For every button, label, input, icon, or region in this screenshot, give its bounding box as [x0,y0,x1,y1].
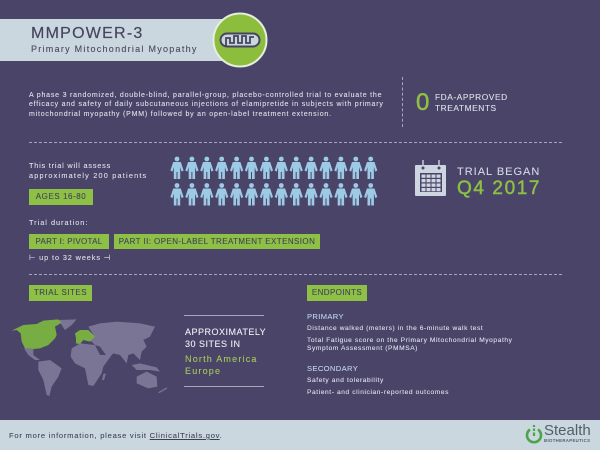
intro text: efficacy and safety of daily subcutaneous injections of elamipretide in subjects with primary [29,101,384,108]
primary item 2 [307,337,513,352]
logo subtitle: BIOTHERAPEUTICS [544,438,590,443]
duration note: ⊢ up to 32 weeks ⊣ [29,253,111,262]
stat: zero: 0 [416,89,429,116]
patient text: approximately 200 patients [29,171,147,180]
patient text [29,161,147,180]
people pictogram [170,156,378,206]
tag: ages: AGES 16-80 [36,192,86,201]
logo mark [526,425,542,444]
primary item 2: Total Fatigue score on the Primary Mitochondrial Myopathy [307,337,513,344]
intro text: A phase 3 randomized, double-blind, parallel-group, placebo-controlled trial to evaluate the [29,92,382,99]
patient text: This trial will assess [29,161,111,170]
tag: part 2 [114,234,320,249]
sites regions: North America [185,354,258,364]
primary items: Distance walked (meters) in the 6-minute walk test [307,325,483,332]
tag: part 2: PART II: OPEN-LABEL TREATMENT EXTENSION [119,237,315,246]
stat label [435,92,508,113]
stat label: TREATMENTS [435,103,497,113]
icon: mitochondrion [212,12,268,68]
sites regions: Europe [185,366,221,376]
sites count: APPROXIMATELY [185,327,266,337]
endpoints: primary heading: PRIMARY [307,312,344,321]
primary item 2: Symptom Assessment (PMMSA) [307,345,418,352]
trial began label: TRIAL BEGAN [457,166,540,178]
sites count: 30 SITES IN [185,339,241,349]
tag: trial sites: TRIAL SITES [34,288,87,297]
stat label: FDA-APPROVED [435,92,508,102]
footer text: For more information, please visit ClinicalTrials.gov. [9,431,223,440]
intro text: mitochondrial myopathy (PMM) followed by an open-label treatment extension. [29,111,332,118]
intro text [29,92,384,118]
sites count [185,327,266,349]
sites regions [185,354,258,376]
tag: part 1: PART I: PIVOTAL [35,237,103,246]
endpoints: secondary heading: SECONDARY [307,364,358,373]
tag: endpoints [307,285,367,301]
footer band [0,420,600,450]
trial began date: Q4 2017 [457,178,541,199]
secondary item 2: Patient- and clinician-reported outcomes [307,389,449,396]
world map [12,319,168,396]
header band [0,19,235,61]
trial duration label: Trial duration: [29,218,88,227]
subtitle: Primary Mitochondrial Myopathy [31,44,198,54]
logo name: Stealth [544,422,591,439]
title: MMPOWER-3 [31,25,144,42]
tag: endpoints: ENDPOINTS [312,288,362,297]
secondary item 1: Safety and tolerability [307,377,384,384]
tag: trial sites [29,285,92,301]
tag: ages [29,189,93,205]
icon: calendar [415,160,446,196]
tag: part 1 [29,234,109,249]
